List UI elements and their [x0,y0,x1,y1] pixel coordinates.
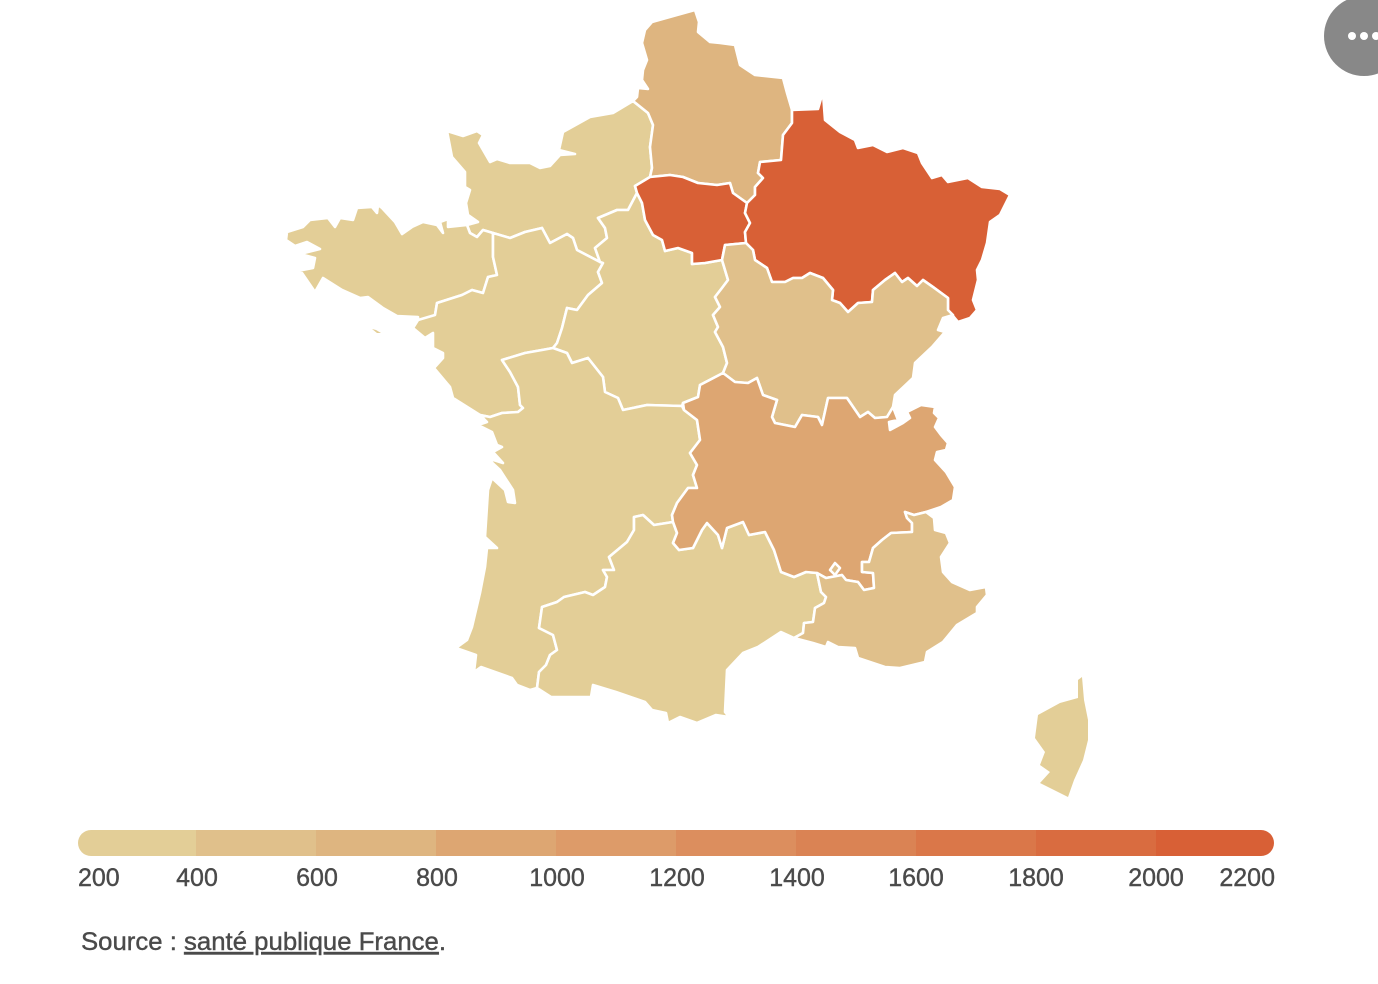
region: Nouvelle-Aquitaine [456,348,700,690]
region: Provence-Alpes-Côte d'Azur [794,512,987,668]
region: Bourgogne-Franche-Comté [713,243,953,427]
legend: scale labels: 1600 [888,864,944,892]
legend: scale labels: 800 [416,864,458,892]
legend: scale labels: 200 [78,864,120,892]
legend: scale labels: 1000 [529,864,585,892]
region: Corse [1035,677,1088,797]
source line: Source : santé publique France . [81,928,446,956]
region: Occitanie [537,515,826,723]
region: Hauts-de-France [633,10,792,203]
region: Île-de-France [635,175,750,264]
legend: scale labels: 1800 [1008,864,1064,892]
legend: scale labels: 2200 [1219,864,1275,892]
legend: scale labels: 1200 [649,864,705,892]
enclave de Valréas [830,563,840,575]
legend: scale labels: 400 [176,864,218,892]
region: Normandie [447,101,653,262]
choropleth map of France [286,10,1088,797]
region: Bretagne [286,205,497,322]
region: Centre-Val de Loire [553,193,728,410]
region: Grand Est [745,93,1010,322]
legend: scale labels: 1400 [769,864,825,892]
legend: colour scale bar [78,830,1274,856]
region: Pays de la Loire [413,228,603,417]
island: Belle-Île [372,329,381,333]
icon: more options button [1324,0,1378,76]
legend: scale labels [78,864,1275,892]
region: Auvergne-Rhône-Alpes [672,373,955,590]
legend: scale labels: 2000 [1128,864,1184,892]
legend: scale labels: 600 [296,864,338,892]
